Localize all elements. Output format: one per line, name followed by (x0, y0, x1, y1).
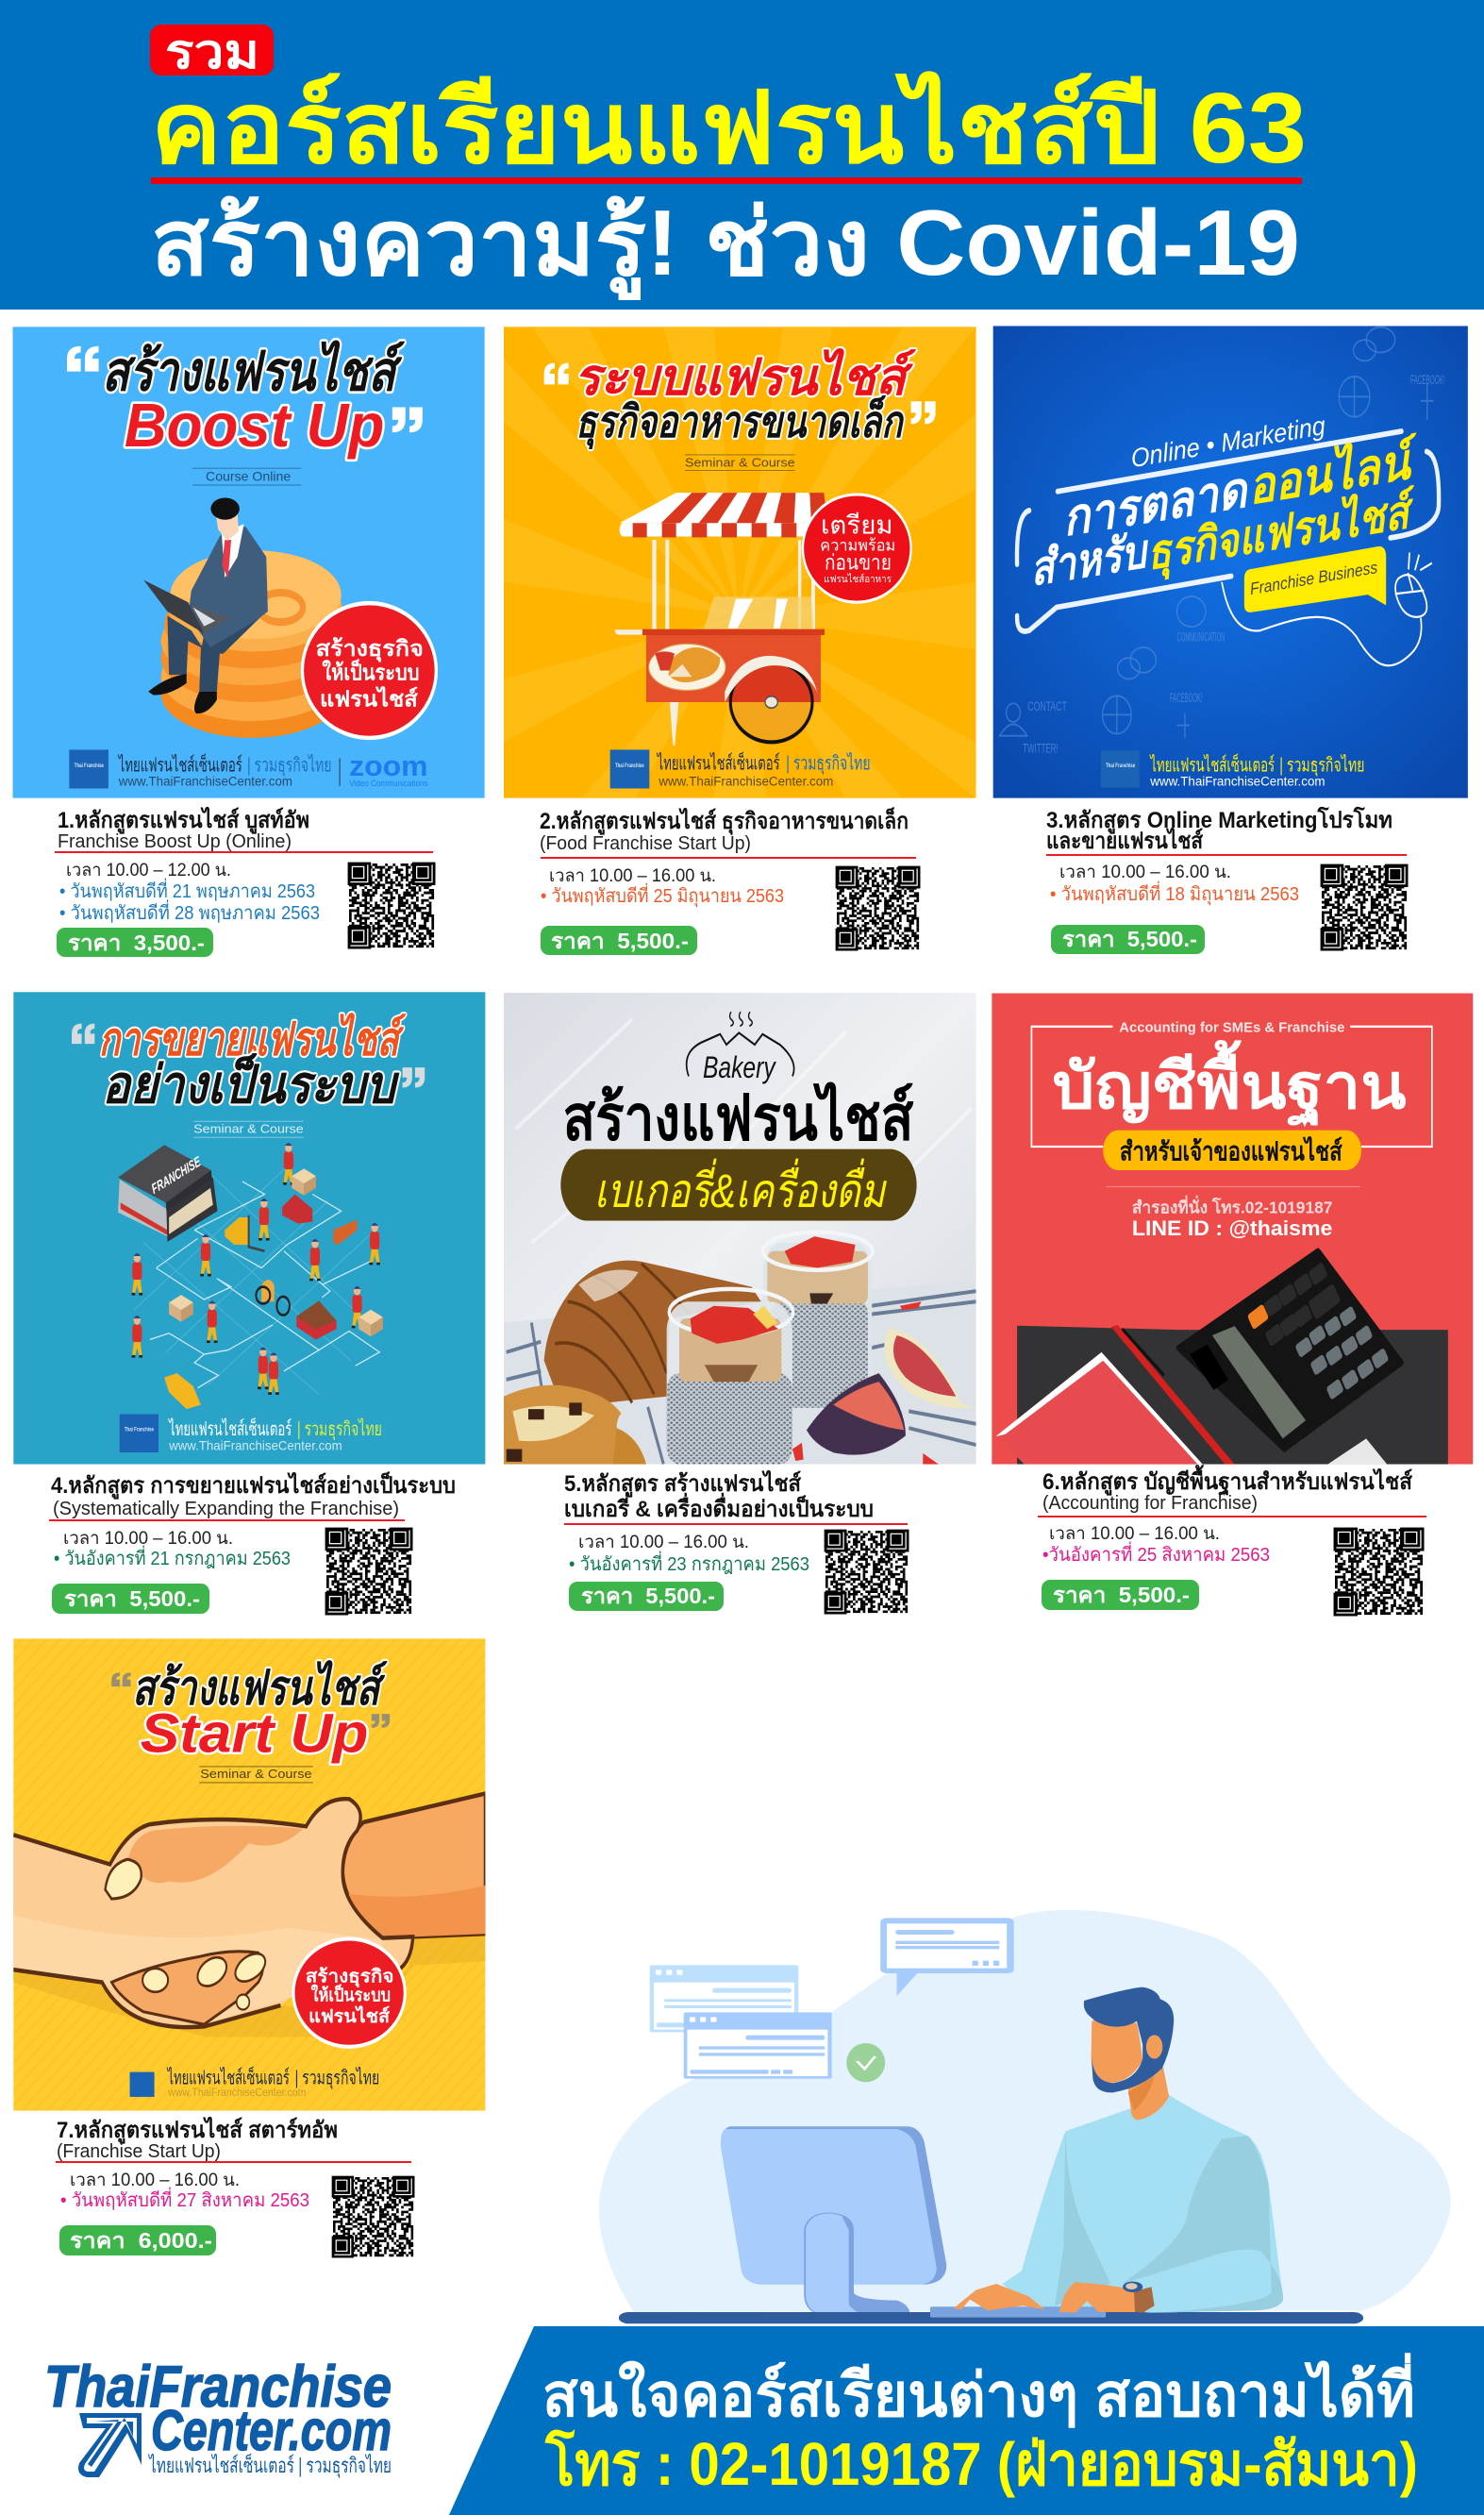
illustration: handshake (13, 1794, 485, 2037)
panel 3 caption: 3.หลักสูตร Online Marketingโปรโมท (1046, 806, 1392, 834)
panel 3: online marketing poster: COMMUNICATION (1176, 629, 1225, 645)
footer logo: | รวมธุรกิจไทย (295, 2066, 379, 2090)
poster heading: สร้างแฟรนไชส์ (563, 1081, 914, 1153)
panel 6 caption: •วันอังคารที่ 25 สิงหาคม 2563 (1042, 1541, 1270, 1566)
panel 7 caption: (Franchise Start Up) (57, 2141, 221, 2162)
headline (1017, 411, 1439, 631)
panel 5 caption (564, 1469, 908, 1613)
panel 6 caption: เวลา 10.00 – 16.00 น. (1049, 1524, 1220, 1544)
badge: prepare (803, 495, 911, 602)
price pill (59, 2225, 216, 2255)
poster heading: การขยายแฟรนไชส์ (99, 1013, 407, 1065)
reservation contact: สำรองที่นั่ง โทร.02-1019187 (1132, 1195, 1333, 1217)
contact banner: สนใจคอร์สเรียนต่างๆ สอบถามได้ที่ (542, 2353, 1415, 2429)
QR code (349, 863, 434, 947)
panel 5 caption: 5.หลักสูตร สร้างแฟรนไชส์ (564, 1469, 801, 1498)
footer logos: Video Communications (349, 778, 428, 788)
footer logo: www.ThaiFranchiseCenter.com (1149, 774, 1326, 789)
footer logos: zoom (349, 750, 428, 782)
framed heading: Accounting for SMEs & Franchise (1119, 1019, 1345, 1035)
seminar label: Seminar & Course (200, 1769, 312, 1781)
badge: build business (293, 1939, 405, 2047)
poster heading: Boost Up (125, 393, 384, 461)
contact banner (449, 2326, 1484, 2515)
panel 7 caption: เวลา 10.00 – 16.00 น. (70, 2171, 240, 2190)
headline: Online • Marketing (1129, 411, 1327, 474)
framed heading: สำหรับเจ้าของแฟรนไชส์ (1120, 1136, 1342, 1166)
badge: build business: แฟรนไชส์ (320, 686, 418, 712)
badge: prepare: เตรียม (821, 511, 893, 540)
seminar label (199, 1767, 313, 1783)
icon: arrow (78, 2413, 142, 2477)
price pill: ราคา 3,500.- (68, 931, 205, 955)
illustration: food cart (615, 493, 827, 746)
panel 3 caption (1046, 806, 1407, 954)
pill: bakery and drinks (560, 1149, 917, 1221)
panel 6: accounting poster (992, 993, 1473, 1465)
panel 2 caption: (Food Franchise Start Up) (540, 833, 751, 854)
footer logos: www.ThaiFranchiseCenter.com (118, 774, 292, 789)
panel 7 caption: 7.หลักสูตรแฟรนไชส์ สตาร์ทอัพ (57, 2116, 338, 2144)
QR code (333, 2177, 413, 2256)
badge: รวม: รวม (165, 25, 259, 78)
panel 7 caption: • วันพฤหัสบดีที่ 27 สิงหาคม 2563 (60, 2187, 309, 2211)
poster heading: ธุรกิจอาหารขนาดเล็ก (575, 395, 905, 449)
panel 4: expanding franchise poster (13, 992, 485, 1465)
callout: franchise business: Franchise Business (1249, 559, 1378, 599)
footer logo (120, 1414, 382, 1453)
panel 2: food franchise poster (504, 327, 976, 798)
icon: check badge (846, 2043, 885, 2082)
price pill: ราคา 6,000.- (70, 2228, 212, 2253)
badge: build business: สร้างธุรกิจ (306, 1967, 393, 1987)
illustration: man on coin stack (143, 497, 342, 738)
headline: การตลาด (1060, 461, 1251, 546)
panel 3: online marketing poster: CONTACT (1027, 699, 1067, 713)
panel 6 caption: (Accounting for Franchise) (1042, 1493, 1258, 1514)
poster heading (544, 347, 936, 449)
seminar label: Seminar & Course (193, 1124, 304, 1136)
pill: bakery and drinks: เบเกอรี่&เครื่องดื่ม (594, 1158, 887, 1217)
panel 1 caption: • วันพฤหัสบดีที่ 28 พฤษภาคม 2563 (59, 899, 320, 924)
illustration: man at computer (599, 1910, 1451, 2323)
logo: ThaiFranchise Center.com: ThaiFranchise (44, 2355, 392, 2420)
footer logo: ไทยแฟรนไชส์เซ็นเตอร์ (166, 2065, 290, 2088)
footer logos: ไทยแฟรนไชส์เซ็นเตอร์ (117, 752, 242, 776)
panel 4 caption: (Systematically Expanding the Franchise) (53, 1499, 399, 1519)
footer logo: Thai Franchise (1106, 763, 1136, 769)
course online label: Course Online (206, 469, 292, 484)
price pill (52, 1584, 209, 1614)
footer logo: ไทยแฟรนไชส์เซ็นเตอร์ (1149, 752, 1275, 776)
poster heading: Start Up (141, 1702, 368, 1764)
panel 4 caption: 4.หลักสูตร การขยายแฟรนไชส์อย่างเป็นระบบ (51, 1471, 456, 1500)
QR code (825, 1531, 908, 1613)
poster heading: อย่างเป็นระบบ (102, 1053, 400, 1115)
framed heading (1031, 1019, 1432, 1170)
front browser window (684, 2012, 832, 2079)
poster heading (67, 340, 423, 461)
panel 3 caption: เวลา 10.00 – 16.00 น. (1059, 863, 1231, 882)
desk (619, 2312, 1363, 2323)
badge: build business: สร้างธุรกิจ (316, 637, 424, 662)
speech bubble (880, 1918, 1014, 1996)
monitor (721, 2126, 946, 2316)
title line 2: สร้างความรู้! ช่วง Covid-19 (151, 191, 1300, 301)
footer logo: | รวมธุรกิจไทย (1279, 754, 1364, 778)
panel 5 caption: • วันอังคารที่ 23 กรกฎาคม 2563 (569, 1551, 809, 1575)
reservation contact: LINE ID : @thaisme (1132, 1217, 1332, 1241)
panel 2 caption: • วันพฤหัสบดีที่ 25 มิถุนายน 2563 (541, 882, 784, 908)
panel 7 caption (56, 2116, 413, 2256)
panel 3 caption: และขายแฟรนไชส์ (1046, 827, 1203, 854)
headline: ออนไลน์ (1246, 431, 1422, 514)
title line 1: คอร์สเรียนแฟรนไชส์ปี 63 (151, 71, 1307, 184)
badge: build business: แฟรนไชส์ (308, 2005, 391, 2026)
footer logo: | รวมธุรกิจไทย (786, 751, 871, 776)
logo: ThaiFranchise Center.com (44, 2355, 392, 2478)
panel 2 caption: 2.หลักสูตรแฟรนไชส์ ธุรกิจอาหารขนาดเล็ก (540, 807, 909, 836)
price pill: ราคา 5,500.- (64, 1586, 200, 1611)
poster heading (72, 1013, 425, 1115)
footer logos: Thai Franchise (75, 763, 104, 769)
course online label (192, 468, 301, 485)
price pill (57, 928, 213, 957)
badge: build business (302, 603, 436, 738)
footer logo: ไทยแฟรนไชส์เซ็นเตอร์ (656, 750, 780, 774)
badge: prepare: ความพร้อม (820, 537, 895, 555)
panel 1: Boost Up poster (13, 327, 485, 798)
panel 5: bakery poster (504, 993, 976, 1465)
footer logo: www.ThaiFranchiseCenter.com (168, 1438, 342, 1453)
QR code (1335, 1529, 1423, 1615)
footer logos (69, 749, 428, 789)
footer logo: www.ThaiFranchiseCenter.com (658, 774, 833, 789)
footer logo: Thai Franchise (615, 763, 644, 769)
badge: prepare: แฟรนไชส์อาหาร (824, 573, 892, 585)
QR code (837, 867, 919, 949)
red divider (151, 177, 1302, 184)
panel 3: online marketing poster (993, 326, 1468, 798)
poster heading: สร้างแฟรนไชส์ (102, 340, 405, 402)
panel 4 caption: เวลา 10.00 – 16.00 น. (63, 1529, 233, 1549)
background blob (599, 1910, 1451, 2312)
badge: รวม (150, 25, 274, 78)
header banner (0, 0, 1484, 310)
photo: calculator, pen and notebook (995, 1251, 1448, 1465)
footer logo (130, 2065, 379, 2099)
price pill: ราคา 5,500.- (551, 929, 689, 953)
callout: franchise business (1244, 546, 1386, 612)
illustration: network map: FRANCHISE (150, 1153, 203, 1197)
price pill: ราคา 5,500.- (1062, 927, 1197, 951)
panel 3: online marketing poster: FACEBOOK! (1410, 373, 1445, 387)
panel 1 caption: • วันพฤหัสบดีที่ 21 พฤษภาคม 2563 (59, 878, 315, 902)
price pill (541, 926, 697, 955)
panel 4 caption: • วันอังคารที่ 21 กรกฎาคม 2563 (54, 1545, 291, 1569)
panel 3: online marketing poster: TWITTER! (1023, 741, 1059, 756)
footer logo (1101, 750, 1364, 789)
badge: build business: ให้เป็นระบบ (311, 1982, 391, 2005)
panel 7: start up poster (13, 1638, 485, 2111)
badge: build business: ให้เป็นระบบ (322, 658, 419, 685)
panel 1 caption: เวลา 10.00 – 12.00 น. (66, 861, 231, 880)
footer logo (610, 749, 871, 789)
seminar label (685, 455, 795, 470)
QR code (1322, 865, 1407, 949)
panel 1 caption: 1.หลักสูตรแฟรนไชส์ บูสท์อัพ (58, 806, 309, 834)
panel 3 caption: • วันพฤหัสบดีที่ 18 มิถุนายน 2563 (1050, 880, 1299, 906)
icon: bakery logo (687, 1012, 794, 1085)
panel 2 caption (540, 807, 919, 955)
QR code (326, 1529, 411, 1614)
headline: สำหรับ (1028, 525, 1152, 596)
framed heading: บัญชีพื้นฐาน (1053, 1040, 1407, 1127)
poster heading: ระบบแฟรนไชส์ (574, 347, 917, 407)
photo: food still life (504, 1232, 976, 1465)
icon: bakery logo: Bakery (703, 1050, 776, 1085)
panel 5 caption: เวลา 10.00 – 16.00 น. (578, 1533, 749, 1552)
panel 1 caption (55, 806, 434, 957)
footer logo: ไทยแฟรนไชส์เซ็นเตอร์ (168, 1417, 292, 1440)
seminar label (193, 1121, 304, 1137)
illustration: network map (118, 1143, 383, 1409)
footer logos: | รวมธุรกิจไทย (247, 753, 332, 778)
panel 1 caption: Franchise Boost Up (Online) (58, 831, 292, 852)
price pill (1042, 1580, 1199, 1610)
footer logo: Thai Franchise (125, 1427, 154, 1434)
logo: ThaiFranchise Center.com: ไทยแฟรนไชส์เซ็นเตอร์ | รวมธุรกิจไทย (148, 2452, 392, 2478)
contact banner: โทร : 02-1019187 (ฝ่ายอบรม-สัมนา) (544, 2428, 1418, 2498)
reservation contact (1107, 1186, 1359, 1241)
badge: prepare: ก่อนขาย (825, 551, 892, 575)
panel 5 caption: เบเกอรี่ & เครื่องดื่มอย่างเป็นระบบ (564, 1492, 874, 1522)
footer logo: www.ThaiFranchiseCenter.com (167, 2087, 306, 2099)
faint background icons (1000, 327, 1434, 738)
footer logo: | รวมธุรกิจไทย (297, 1417, 382, 1442)
panel 6 caption: 6.หลักสูตร บัญชีพื้นฐานสำหรับแฟรนไชส์ (1042, 1464, 1412, 1497)
man (930, 1987, 1283, 2318)
poster heading: สร้างแฟรนไชส์ (132, 1660, 388, 1715)
seminar label: Seminar & Course (685, 457, 795, 470)
headline: ธุรกิจแฟรนไชส์ (1144, 484, 1420, 583)
panel 4 caption (49, 1471, 456, 1614)
price pill: ราคา 5,500.- (581, 1584, 715, 1608)
poster heading (111, 1660, 390, 1764)
panel 2 caption: เวลา 10.00 – 16.00 น. (549, 866, 716, 886)
panel 3: online marketing poster: FACEBOOK! (1170, 691, 1203, 705)
panel 6 caption (1038, 1464, 1426, 1615)
icon: mouse and cord (1222, 553, 1432, 665)
back browser window (650, 1965, 798, 2032)
logo: ThaiFranchise Center.com: Center.com (151, 2399, 392, 2462)
price pill: ราคา 5,500.- (1053, 1583, 1190, 1607)
